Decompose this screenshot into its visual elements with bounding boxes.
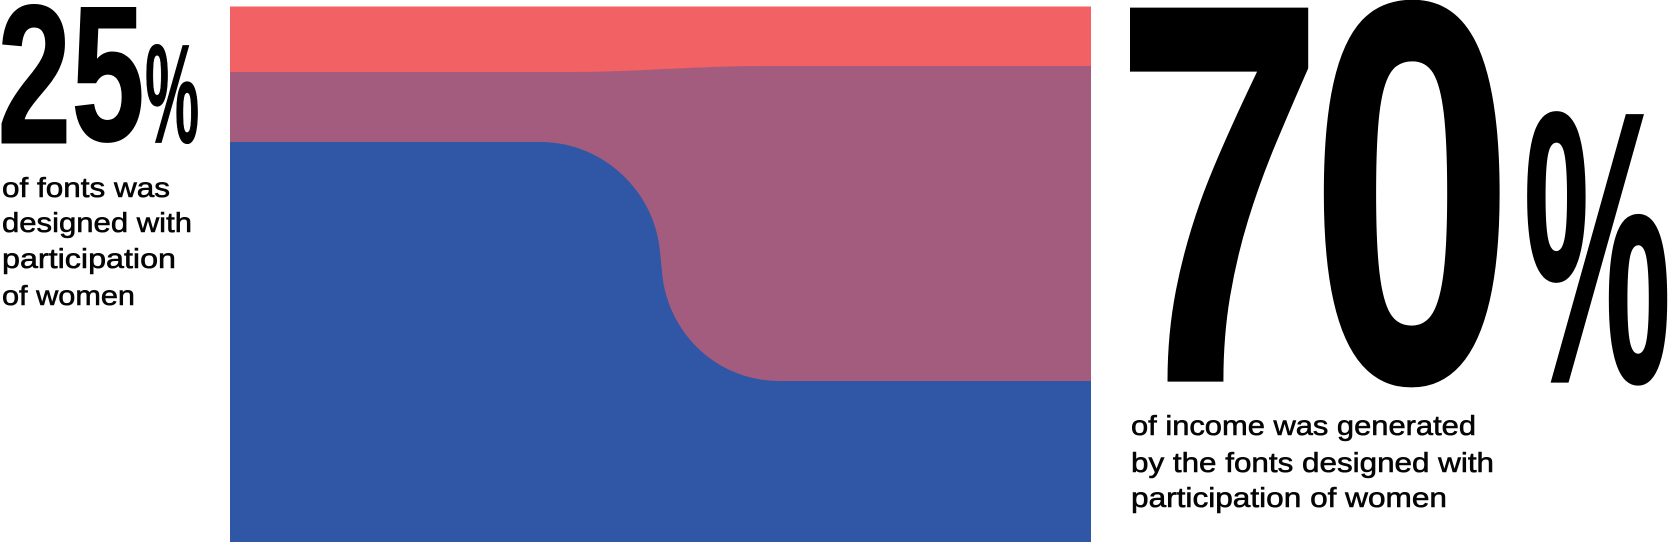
chart: stacked area share of fonts vs income: [230, 6, 1091, 542]
area: blue bottom band: [230, 142, 1091, 542]
panel: left statistic 25%: [0, 0, 199, 311]
text: right caption: participation of women: [1131, 482, 1447, 513]
big number: 25%: %: [145, 17, 199, 174]
text: left caption: of women: [2, 280, 135, 311]
panel: right statistic 70%: [1115, 0, 1668, 513]
big number: 70%: [1115, 0, 1668, 497]
text: left caption: [2, 172, 192, 311]
text: right caption: by the fonts designed with: [1131, 447, 1494, 478]
area: mauve middle band: [230, 66, 1091, 400]
text: left caption: of fonts was: [2, 172, 170, 203]
text: left caption: participation: [2, 243, 176, 274]
area: red top band: [230, 6, 1091, 76]
text: right caption: of income was generated: [1131, 410, 1476, 441]
big number: 25%: [0, 0, 199, 185]
text: right caption: [1131, 410, 1494, 513]
big number: 70%: %: [1524, 32, 1668, 465]
text: left caption: designed with: [2, 207, 192, 238]
